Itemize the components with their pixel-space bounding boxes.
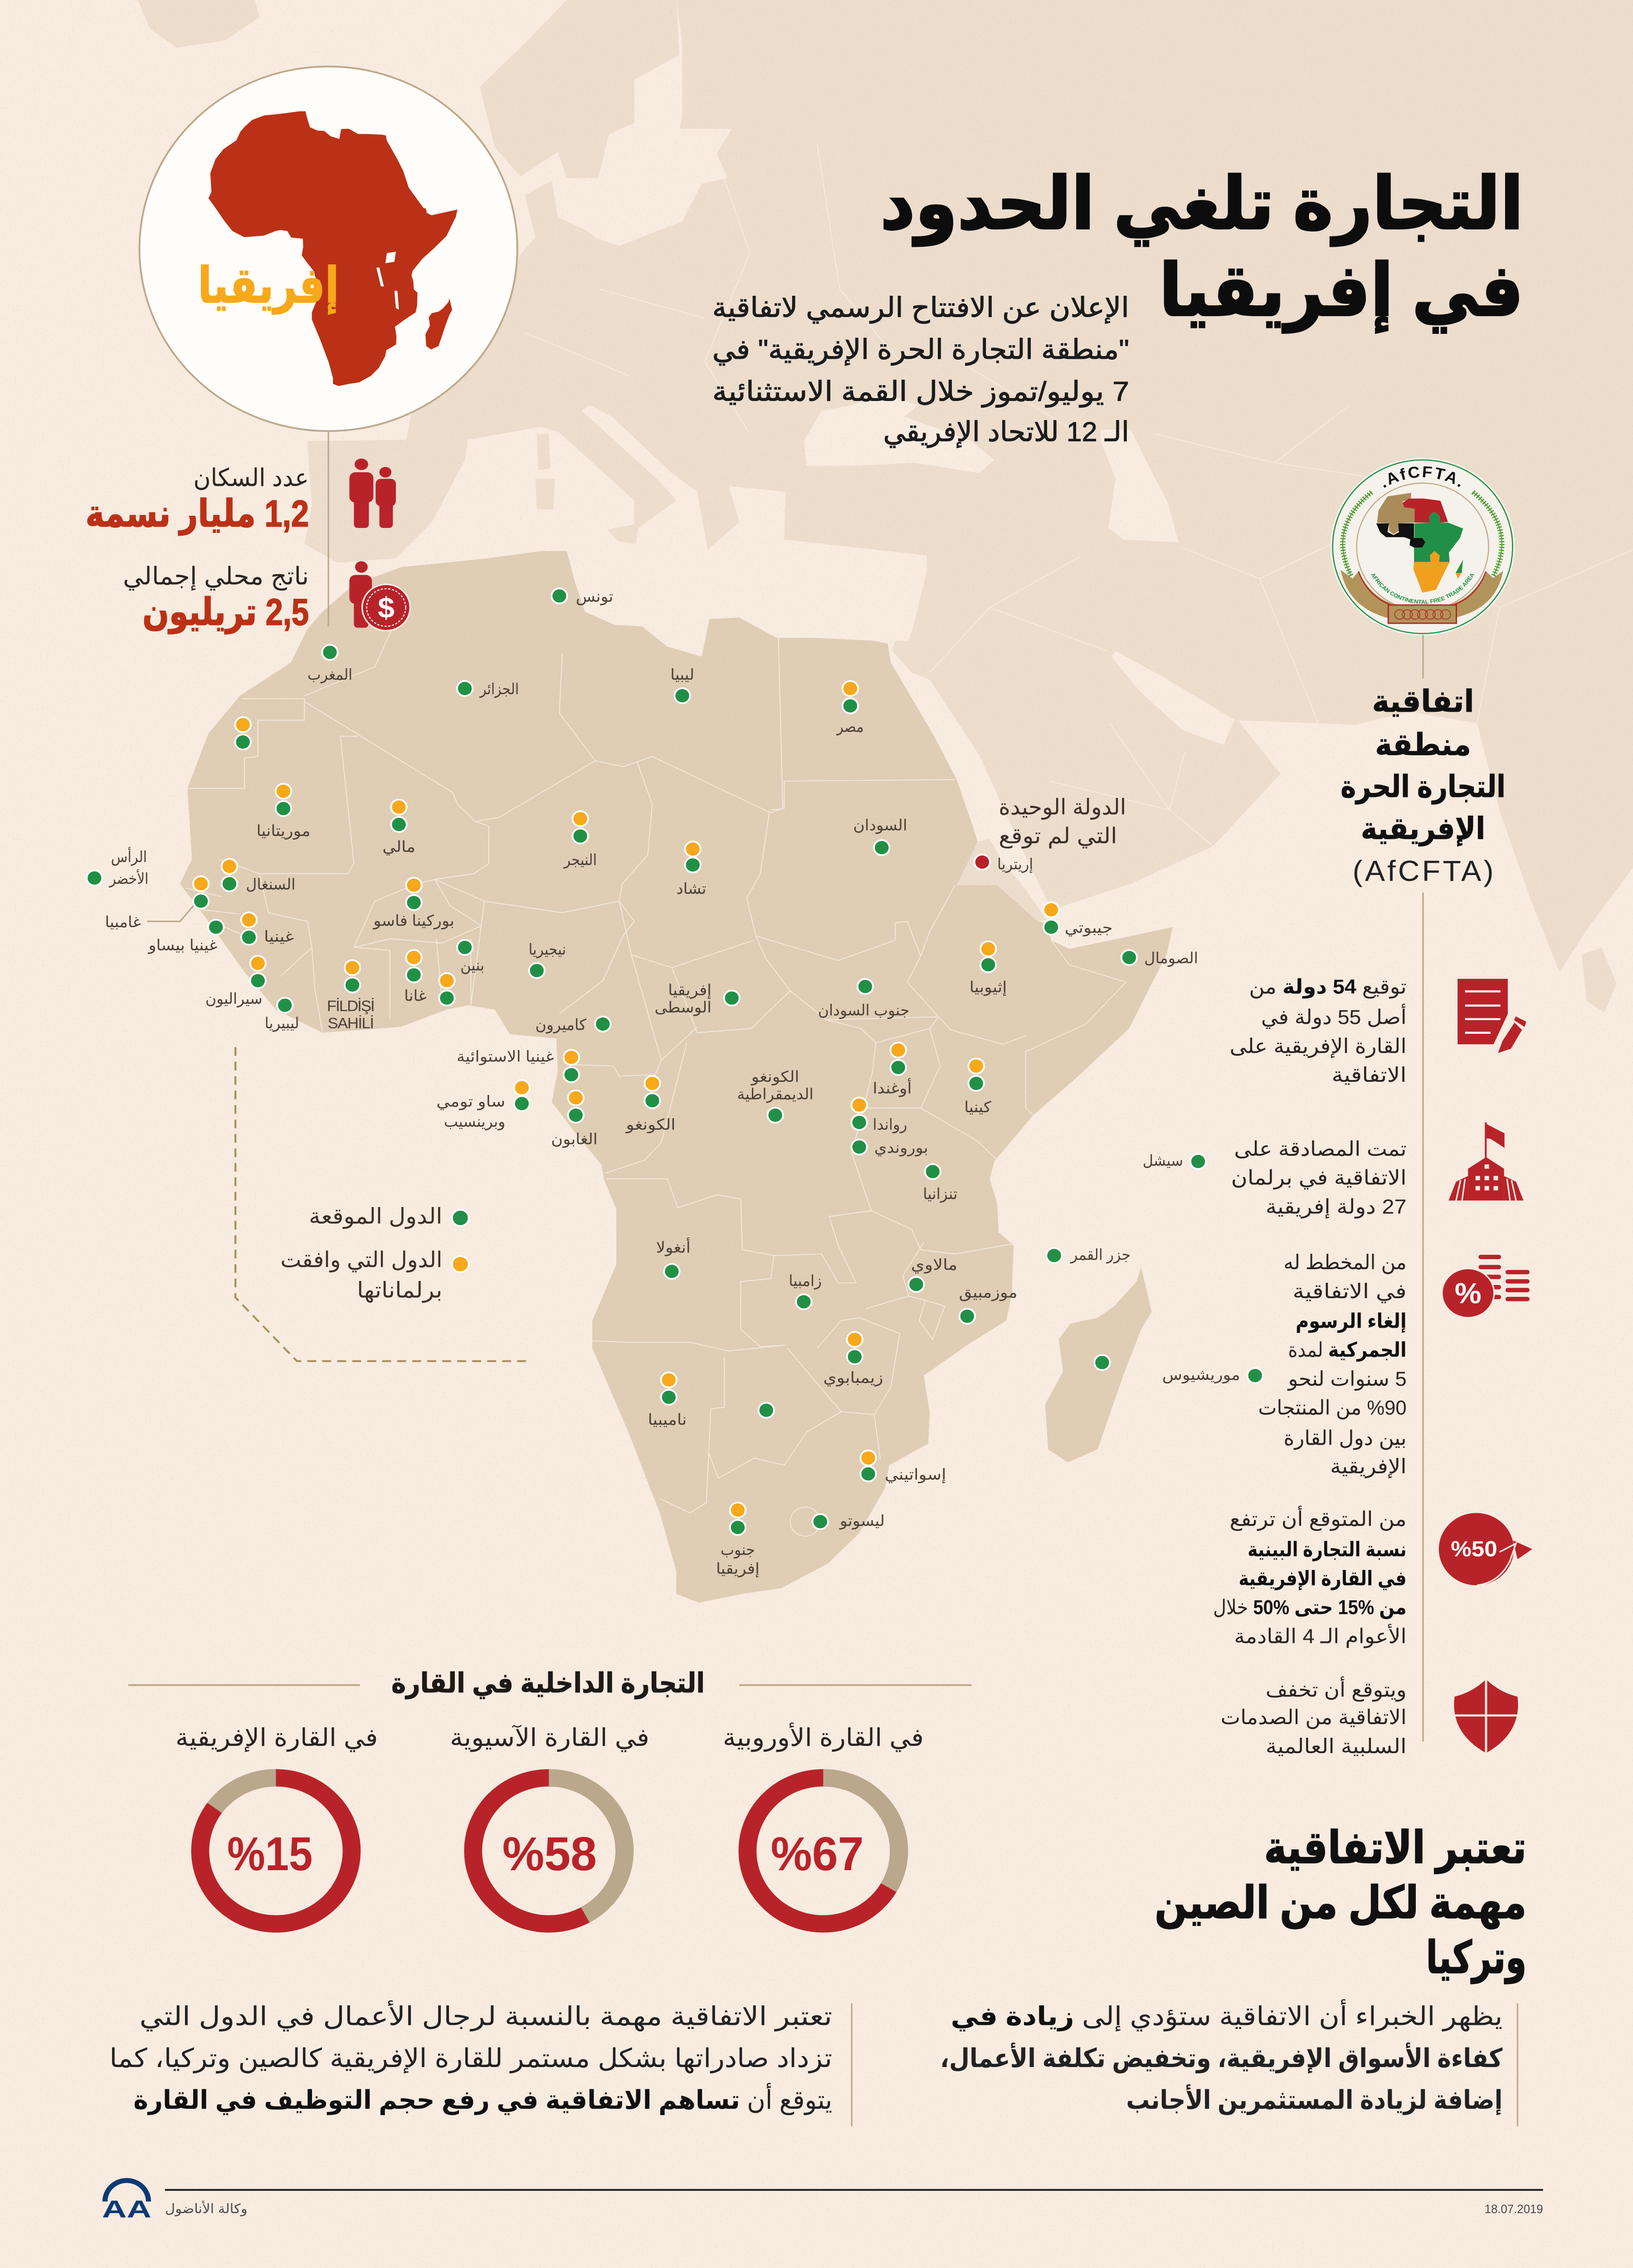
callout: only country not signing: التي لم توقع (999, 824, 1117, 849)
text block: signed: الاتفاقية (1331, 1064, 1407, 1086)
stat: GDP: 2,5 تريليون (142, 591, 309, 634)
country: Sudan (853, 817, 907, 855)
country: Gambia (105, 876, 209, 931)
country: Central African Republic: إفريقيا (668, 982, 712, 999)
country: Chad: تشاد (676, 880, 706, 898)
intro text: 7 يوليو/تموز خلال القمة الاستثنائية (712, 376, 1129, 407)
country: Congo: الكونغو (625, 1116, 676, 1134)
country: Ivory Coast (327, 960, 375, 1032)
country: Guinea-Bissau (147, 919, 224, 954)
text block: business people: تزداد صادراتها بشكل مستمر للقارة الإفريقية كالصين وتركيا، كما (109, 2044, 832, 2073)
country: Mali: مالي (382, 839, 415, 856)
chart: Asia 58 percent: %58 (502, 1827, 597, 1881)
country: Guinea (241, 912, 294, 945)
country: Botswana (759, 1403, 774, 1418)
heading: AfCFTA agreement: (AfCFTA) (1353, 855, 1493, 887)
country: Cape Verde: الأخضر (109, 869, 148, 888)
country: South Africa (716, 1503, 760, 1578)
text block: signed: توقيع 54 دولة من (1249, 975, 1407, 999)
country: Libya (670, 666, 694, 703)
label: Africa: إفريقيا (198, 258, 339, 314)
country: Rwanda: رواندا (873, 1116, 907, 1134)
intro text: الـ 12 للاتحاد الإفريقي (883, 417, 1129, 448)
country: Somalia: الصومال (1144, 950, 1198, 968)
text block: customs: الإفريقية (1330, 1455, 1407, 1479)
heading: importance for China and Turkey: تعتبر الاتفاقية (1264, 1823, 1526, 1874)
callout: only country not signing: الدولة الوحيدة (999, 795, 1126, 820)
country: Gambia: غامبيا (105, 914, 141, 931)
date: 18.07.2019 (1485, 2202, 1543, 2216)
country: Kenya: كينيا (964, 1099, 992, 1116)
stat: GDP (123, 562, 309, 634)
country: Ethiopia: إثيوبيا (970, 979, 1007, 996)
country: Equatorial Guinea: غينيا الاستوائية (457, 1048, 554, 1066)
title: في إفريقيا (1159, 250, 1524, 333)
country: Ghana: غانا (404, 987, 427, 1004)
intro text: "منطقة التجارة الحرة الإفريقية" في (712, 334, 1129, 366)
country: Eswatini: إسواتيني (885, 1466, 946, 1484)
country: Mauritania: موريتانيا (256, 823, 310, 840)
icon: Africa silhouette (209, 111, 458, 386)
text block: business people: يتوقع أن تساهم الاتفاقية في رفع حجم التوظيف في القارة (133, 2083, 832, 2116)
country: Guinea: غينيا (264, 928, 294, 945)
connector: circle to stats (328, 431, 329, 626)
country: Ghana (404, 950, 427, 1004)
country: Madagascar (1094, 1355, 1110, 1370)
country: Sao Tome and Principe: وبرينسيب (444, 1114, 505, 1131)
icon: AA logo (102, 2180, 151, 2223)
text block: ratified: 27 دولة إفريقية (1266, 1195, 1407, 1219)
country: Niger: النيجر (563, 851, 597, 869)
country: South Sudan: جنوب السودان (818, 1002, 910, 1019)
country: DR Congo: الديمقراطية (737, 1086, 814, 1103)
chart: Africa 15 percent: في القارة الإفريقية (175, 1724, 378, 1752)
country: Morocco (307, 645, 352, 684)
country: Burundi: بوروندي (874, 1139, 928, 1157)
country: Gabon: الغابون (551, 1131, 598, 1148)
title (880, 164, 1524, 333)
chart: Asia 58 percent (450, 1724, 649, 1924)
icon: people (349, 459, 396, 528)
country: Eswatini (860, 1451, 946, 1484)
country: Gabon (551, 1090, 598, 1148)
country: Namibia: ناميبيا (648, 1411, 687, 1428)
text block: customs: في الاتفاقية (1292, 1280, 1407, 1303)
chart: Asia 58 percent: في القارة الآسيوية (450, 1724, 649, 1752)
country: Morocco: المغرب (307, 666, 352, 684)
country: Sierra Leone (205, 956, 266, 1008)
country: Somalia (1121, 950, 1198, 968)
text block: customs: من المخطط له (1284, 1251, 1407, 1275)
text block: experts: يظهر الخبراء أن الاتفاقية ستؤدي إلى زيادة في (951, 1999, 1502, 2032)
text block: ratified: الاتفاقية في برلمان (1231, 1166, 1407, 1190)
stat: GDP: ناتج محلي إجمالي (123, 562, 309, 591)
title: التجارة تلغي الحدود (880, 164, 1524, 246)
icon: African lakes (376, 252, 399, 309)
country: Guinea-Bissau: غينيا بيساو (147, 937, 217, 954)
country: Ethiopia (970, 941, 1007, 996)
text block: intra-trade forecast: في القارة الإفريقية (1238, 1567, 1407, 1590)
stat: population (85, 464, 309, 536)
country: DR Congo (737, 1069, 814, 1123)
country: Libya: ليبيا (670, 666, 694, 684)
country: Seychelles: سيشل (1143, 1153, 1183, 1169)
country: Tunisia (551, 588, 613, 606)
country: Togo (439, 973, 455, 1006)
country: Egypt: مصر (836, 719, 864, 736)
text block: customs (1258, 1251, 1407, 1479)
heading: AfCFTA agreement (1341, 684, 1506, 887)
text block: customs: بين دول القارة (1284, 1427, 1407, 1450)
icon: shield (1453, 1679, 1519, 1753)
footer (102, 2180, 1543, 2223)
text block: shock mitigation: الاتفاقية من الصدمات (1221, 1706, 1407, 1730)
chart: Africa 15 percent: %15 (227, 1827, 312, 1881)
country: Kenya (964, 1059, 992, 1116)
country: Cape Verde (87, 847, 148, 888)
country: Algeria (457, 681, 519, 698)
heading: importance for China and Turkey: مهمة لكل من الصين (1155, 1878, 1526, 1929)
text block: customs: الجمركية لمدة (1288, 1339, 1407, 1362)
text block: experts (940, 1999, 1517, 2126)
country: Cape Verde: الرأس (111, 847, 147, 866)
country: Malawi (908, 1256, 957, 1292)
country: Angola (656, 1237, 691, 1279)
heading: importance for China and Turkey: وتركيا (1426, 1933, 1526, 1984)
country: Lesotho: ليسوتو (839, 1513, 885, 1530)
country: Namibia (648, 1373, 687, 1428)
country: Central African Republic (654, 982, 740, 1017)
icon: 50 percent growth (1439, 1513, 1532, 1585)
text block: business people (109, 2000, 852, 2126)
country: Nigeria: نيجيريا (529, 941, 566, 958)
text block: shock mitigation (1221, 1676, 1407, 1758)
text block: intra-trade forecast: نسبة التجارة البينية (1248, 1538, 1407, 1561)
country: Tunisia: تونس (576, 588, 613, 606)
agency name: وكالة الأناضول (165, 2200, 248, 2216)
country: Mozambique: موزمبيق (959, 1284, 1018, 1301)
stat: population: عدد السكان (194, 464, 309, 491)
country: Sao Tome and Principe: ساو تومي (436, 1093, 505, 1110)
country: Tanzania (923, 1164, 957, 1203)
country: Ivory Coast: SAHİLİ (328, 1015, 374, 1032)
text block: customs: %90 من المنتجات (1258, 1396, 1407, 1420)
country: Zambia (789, 1272, 822, 1309)
chart: Europe 67 percent (723, 1722, 924, 1924)
heading: AfCFTA agreement: الإفريقية (1361, 812, 1485, 846)
country: Egypt (836, 681, 864, 736)
text block: experts: كفاءة الأسواق الإفريقية، وتخفيض تكلفة الأعمال، (940, 2043, 1502, 2073)
icon: document and pencil (1458, 979, 1526, 1053)
text block: business people: تعتبر الاتفاقية مهمة بالنسبة لرجال الأعمال في الدول التي (140, 2000, 832, 2032)
country: Benin: بنين (460, 957, 484, 975)
icon: parliament (1448, 1122, 1524, 1201)
country: Comoros: جزر القمر (1070, 1246, 1131, 1264)
country: Central African Republic: الوسطى (654, 999, 712, 1017)
stat: population: 1,2 مليار نسمة (85, 493, 309, 536)
country: Niger (563, 811, 597, 869)
text block: ratified (1231, 1138, 1407, 1219)
country: Liberia: ليبيريا (265, 1015, 299, 1032)
country: Djibouti (1043, 902, 1113, 937)
country: Algeria: الجزائر (479, 681, 519, 698)
legend (280, 1204, 469, 1303)
country: Cameroon (535, 1017, 610, 1034)
icon: AfCFTA logo: AFRICAN CONTINENTAL FREE TRADE AREA (1370, 572, 1476, 605)
legend: الدول الموقعة (309, 1204, 442, 1229)
map: Africa continent (180, 551, 1173, 1603)
country: Chad (676, 841, 706, 898)
icon: person with dollar coin (349, 561, 410, 631)
text block: shock mitigation: السلبية العالمية (1266, 1735, 1407, 1758)
text block: shock mitigation: ويتوقع أن تخفف (1266, 1676, 1407, 1702)
country: South Africa: جنوب (721, 1541, 755, 1559)
country: Rwanda (852, 1098, 907, 1134)
country: Mauritius: موريشيوس (1162, 1367, 1240, 1384)
text block: intra-trade forecast: من %15 حتى %50 خلال (1213, 1596, 1407, 1619)
text block: intra-trade forecast: من المتوقع أن ترتفع (1229, 1505, 1407, 1531)
text block: signed: القارة الإفريقية على (1229, 1035, 1407, 1058)
country: Equatorial Guinea (457, 1048, 579, 1082)
text block: customs: إلغاء الرسوم (1296, 1310, 1407, 1333)
chart: Africa 15 percent (175, 1724, 378, 1924)
country: Senegal (222, 859, 295, 893)
country: Eritrea: إريتريا (997, 856, 1033, 873)
text block: intra-trade forecast: الأعوام الـ 4 القادمة (1234, 1623, 1407, 1648)
background map: Eurasia (138, 0, 1633, 1012)
icon: percent and coins: % (1455, 1277, 1482, 1310)
icon: percent and coins (1442, 1255, 1530, 1318)
country: Angola: أنغولا (656, 1237, 691, 1256)
country: Sudan: السودان (853, 817, 907, 834)
section heading: internal trade: التجارة الداخلية في القارة (391, 1668, 705, 1699)
country: Uganda: أوغندا (873, 1078, 912, 1098)
text block: signed: أصل 55 دولة في (1261, 1003, 1407, 1029)
country: Mali (382, 800, 415, 856)
country: Uganda (873, 1042, 912, 1098)
text block: intra-trade forecast (1213, 1505, 1407, 1648)
intro text: الإعلان عن الافتتاح الرسمي لاتفاقية (712, 292, 1129, 324)
country: Western Sahara (235, 717, 251, 749)
country: Djibouti: جيبوتي (1065, 919, 1113, 937)
country: Burundi (852, 1139, 928, 1157)
country: Mauritania (256, 784, 310, 840)
country: Liberia (265, 998, 299, 1032)
text block: ratified: تمت المصادقة على (1234, 1138, 1407, 1160)
text block: customs: 5 سنوات لنحو (1287, 1368, 1407, 1391)
legend: برلماناتها (357, 1278, 442, 1303)
callout: only country not signing (999, 795, 1126, 849)
country: Eritrea (975, 855, 1033, 873)
country: Zambia: زامبيا (789, 1272, 822, 1290)
country: Ivory Coast: FİLDİŞİ (327, 998, 375, 1015)
intro text (712, 292, 1129, 448)
country: Sao Tome and Principe (436, 1080, 530, 1131)
country: Zimbabwe: زيمبابوي (823, 1369, 883, 1387)
country: DR Congo: الكونغو (751, 1069, 799, 1086)
heading: AfCFTA agreement: اتفاقية (1372, 684, 1474, 719)
country: Seychelles (1143, 1153, 1206, 1169)
legend: الدول التي وافقت (280, 1248, 442, 1272)
country: Congo (625, 1076, 676, 1134)
country: Benin (457, 940, 484, 975)
country: Burkina Faso (372, 878, 454, 930)
icon: 50 percent growth: %50 (1451, 1537, 1497, 1561)
icon: AfCFTA logo (1331, 458, 1515, 635)
country: Tanzania: تنزانيا (923, 1186, 957, 1203)
icon: person with dollar coin: $ (378, 591, 395, 624)
country: Comoros (1046, 1246, 1131, 1264)
chart: Europe 67 percent: %67 (771, 1827, 864, 1881)
chart: Europe 67 percent: في القارة الأوروبية (723, 1722, 924, 1752)
country: Lesotho (813, 1513, 885, 1530)
heading: AfCFTA agreement: منطقة (1375, 728, 1471, 762)
heading: AfCFTA agreement: التجارة الحرة (1341, 770, 1506, 805)
country: Malawi: مالاوي (911, 1256, 957, 1274)
panel: Africa circle (140, 67, 517, 431)
heading: importance for China and Turkey (1155, 1823, 1526, 1984)
country: Sierra Leone: سيراليون (205, 991, 263, 1008)
country: Zimbabwe (823, 1332, 883, 1387)
dashed inset frame (235, 1047, 528, 1361)
country: Mozambique (959, 1284, 1018, 1324)
text block: experts: إضافة لزيادة المستثمرين الأجانب (1126, 2084, 1502, 2116)
country: Nigeria (529, 941, 566, 978)
country: Cameroon: كاميرون (535, 1017, 587, 1034)
text block: signed (1229, 975, 1407, 1086)
country: South Africa: إفريقيا (716, 1560, 760, 1578)
country: Burkina Faso: بوركينا فاسو (372, 912, 454, 930)
icon: AA logo: AA (102, 2195, 151, 2223)
country: Senegal: السنغال (246, 876, 295, 893)
icon: AfCFTA logo: .AfCFTA. (1376, 463, 1469, 491)
country: South Sudan (818, 979, 910, 1019)
